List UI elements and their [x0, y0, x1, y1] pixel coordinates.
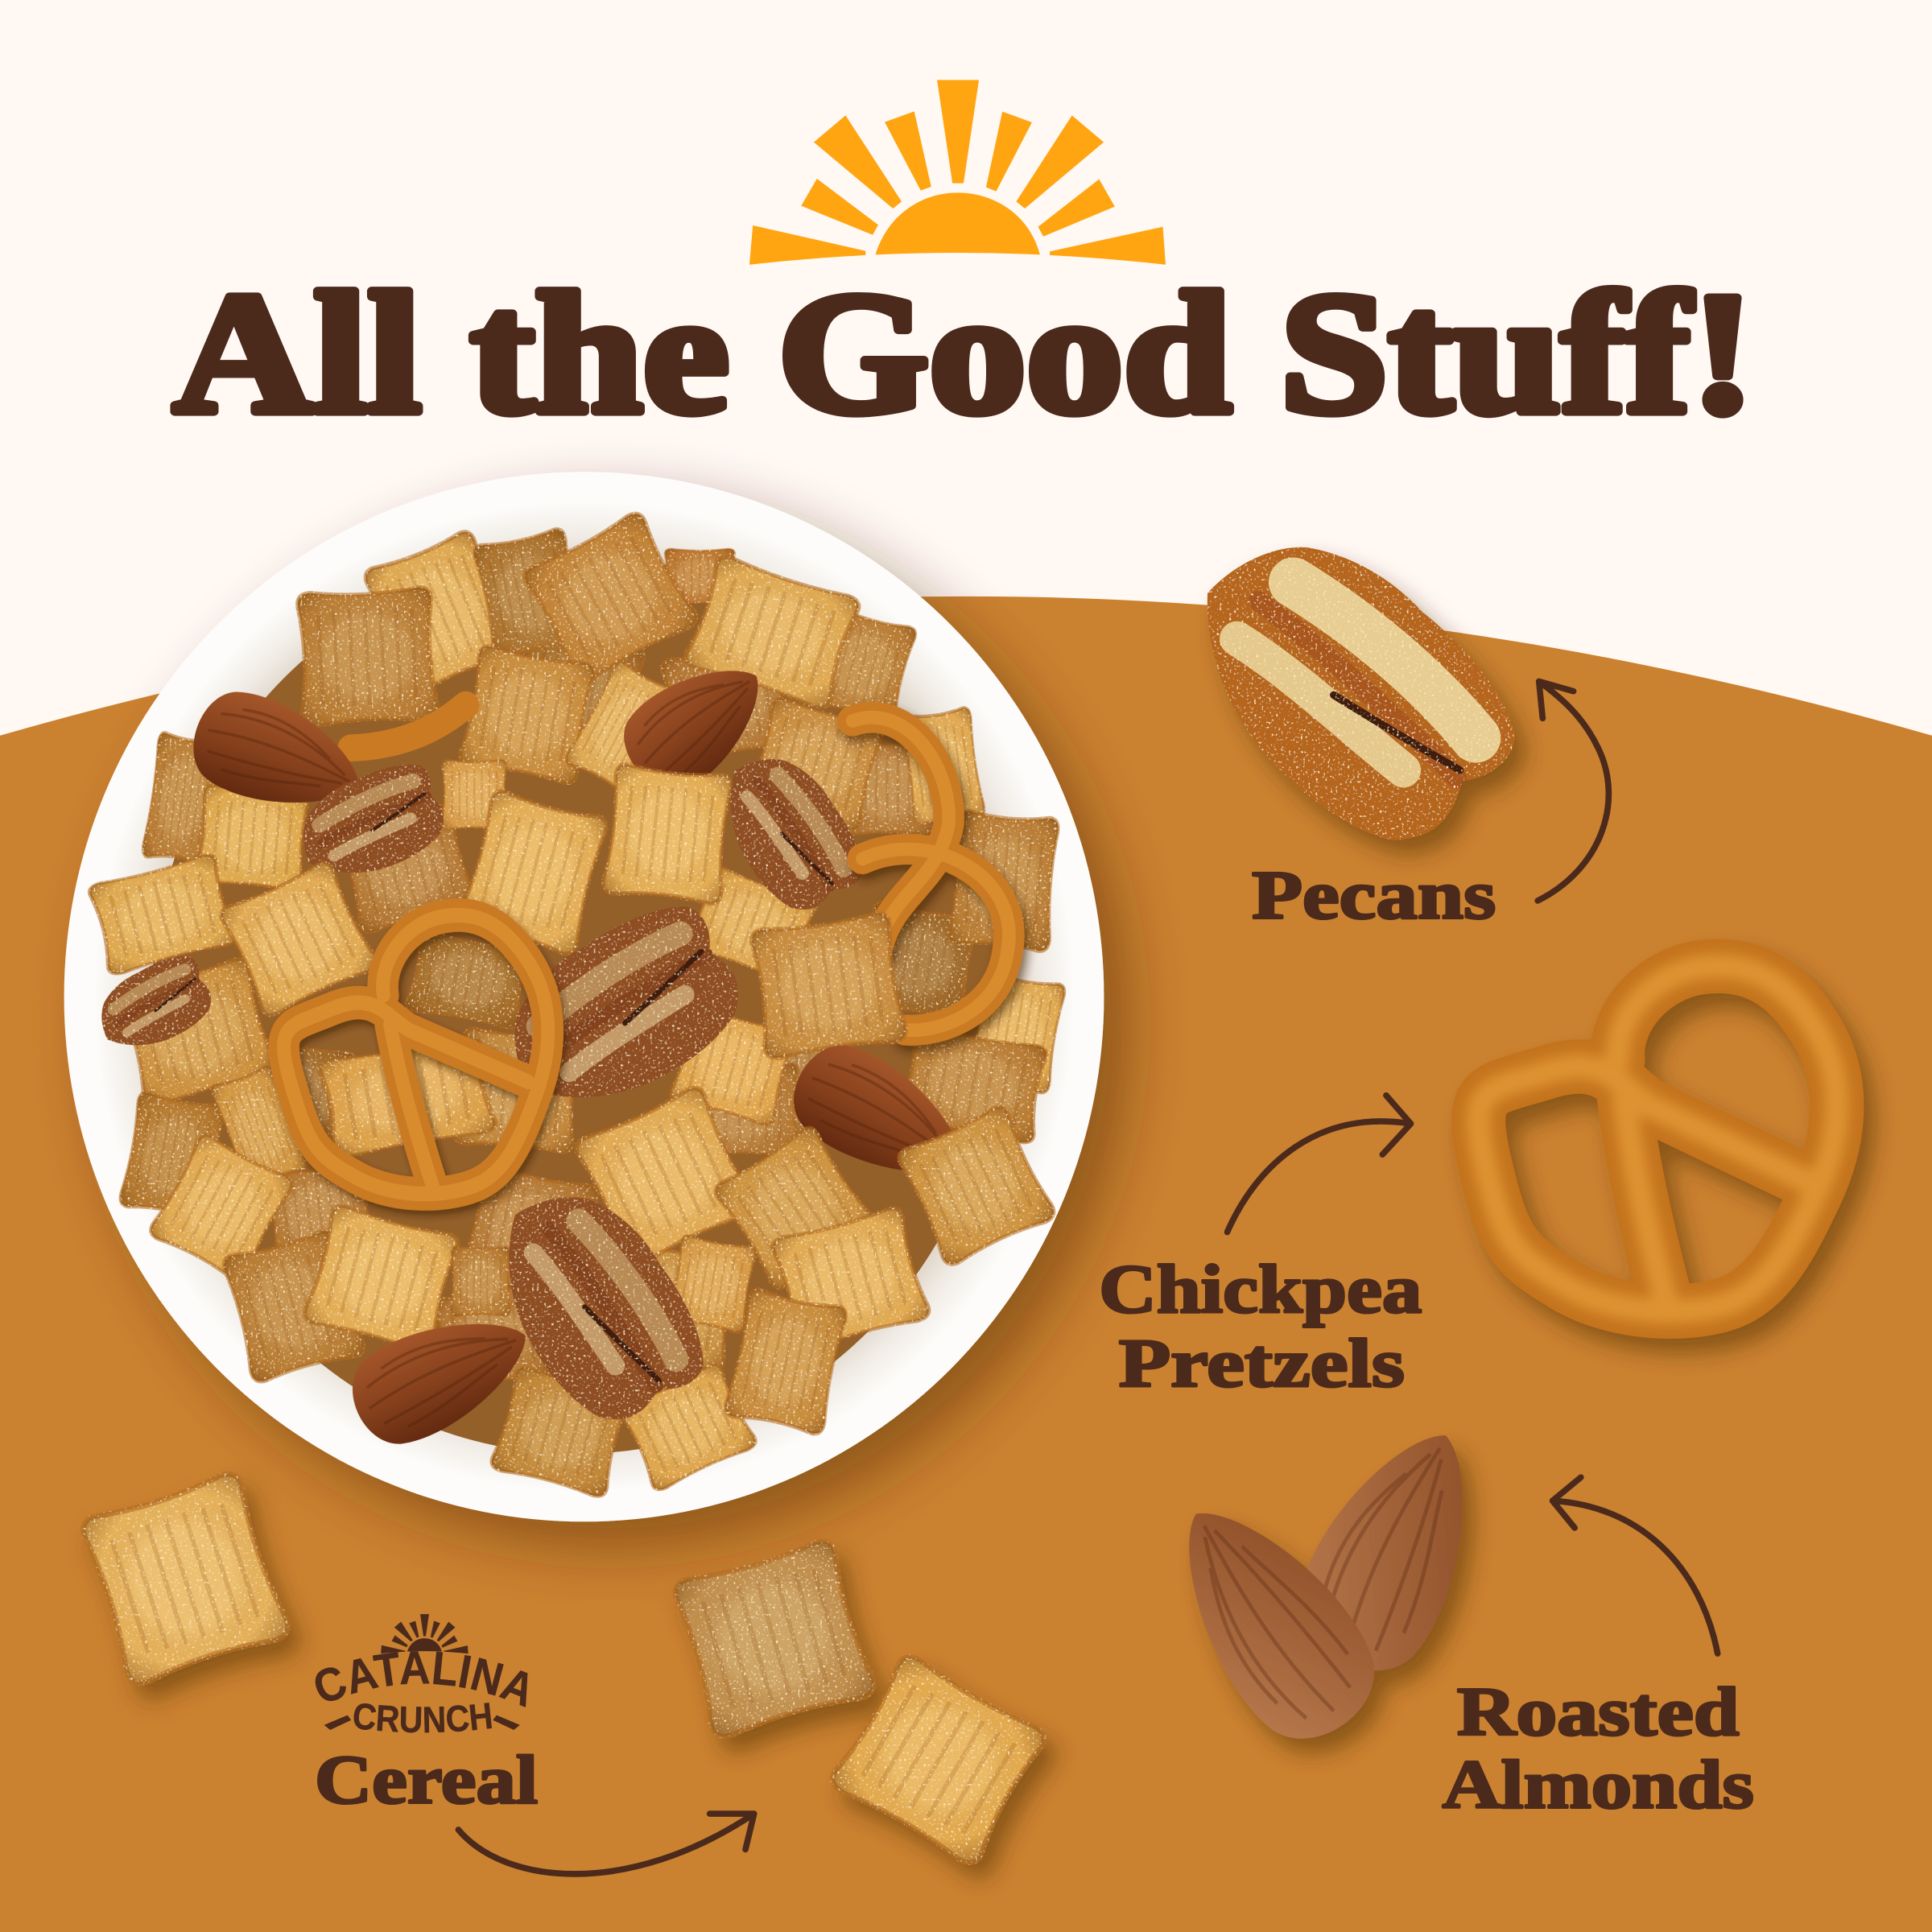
pecan: lower center	[473, 1183, 735, 1439]
label: Pecans: Pecans	[1252, 857, 1496, 933]
label: Chickpea Pretzels: Pretzels	[1119, 1325, 1405, 1402]
pretzel: callout image	[1479, 966, 1837, 1311]
curved pretzel piece	[351, 705, 466, 748]
brown curved panel	[0, 597, 1932, 1932]
pecan: center	[499, 870, 760, 1138]
pretzel: right side of bowl	[852, 717, 1009, 1030]
pecan: callout image	[1208, 547, 1515, 840]
cereal pieces in bowl, middle layer	[217, 696, 886, 1018]
filler pieces behind the mix	[234, 629, 980, 1392]
cereal piece: left	[78, 1470, 291, 1687]
logo: Catalina Crunch	[316, 1614, 528, 1732]
almond: lower right	[777, 1029, 987, 1208]
arrow: almonds	[1553, 1477, 1718, 1653]
arrow: pretzels	[1227, 1096, 1411, 1232]
cereal piece: center right	[749, 911, 907, 1060]
logo sun	[381, 1614, 469, 1653]
arrow: cereal	[458, 1814, 754, 1874]
cereal pieces in bowl, front layer	[221, 1084, 1057, 1492]
pecan: small left	[93, 935, 224, 1069]
title: All the Good Stuff!	[173, 257, 1755, 449]
label: Cereal: Cereal	[315, 1741, 538, 1818]
arrow: pecans	[1538, 681, 1608, 901]
pretzel: large in bowl	[275, 909, 559, 1203]
cereal: callout images	[78, 1470, 1050, 1868]
cereal piece: bottom	[489, 1365, 632, 1499]
almond: top center	[608, 638, 786, 807]
label: Roasted Almonds: Almonds	[1443, 1746, 1754, 1823]
cereal piece: brown	[671, 1538, 877, 1740]
icon: sun	[749, 80, 1166, 265]
cereal pieces in bowl, back layer	[87, 510, 1067, 1284]
label: Roasted Almonds	[1443, 1674, 1754, 1823]
label: Chickpea Pretzels: Chickpea	[1099, 1251, 1422, 1327]
almonds: callout image	[1141, 1406, 1509, 1763]
bowl of snack mix	[64, 472, 1104, 1521]
logo wordmark: CATALINA	[316, 1651, 528, 1707]
bowl	[64, 472, 1104, 1521]
label: Roasted Almonds: Roasted	[1457, 1674, 1739, 1750]
cereal piece: golden	[828, 1651, 1050, 1868]
logo wordmark second line: CRUNCH	[354, 1703, 492, 1732]
pecan: right upper	[706, 749, 884, 923]
almond: upper left	[180, 679, 376, 832]
almond: bottom	[337, 1290, 547, 1459]
pecan: upper left	[291, 732, 462, 906]
label: Chickpea Pretzels	[1099, 1251, 1422, 1402]
